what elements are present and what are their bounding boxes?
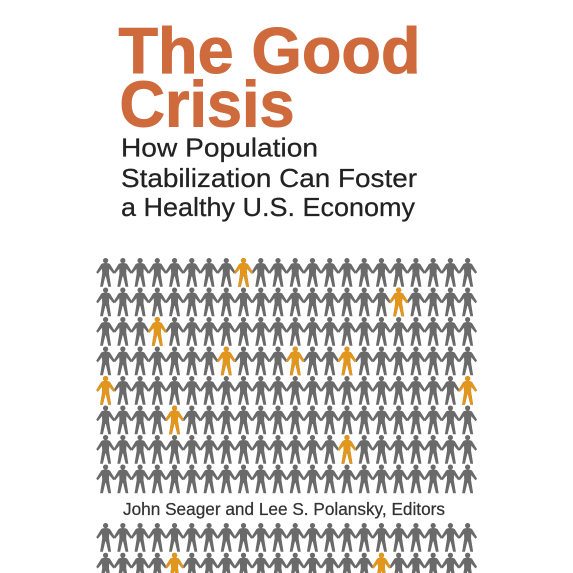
row 6 bbox=[96, 406, 477, 434]
subtitle bbox=[121, 132, 417, 222]
row 2 bbox=[96, 288, 477, 316]
title bbox=[118, 14, 420, 140]
row 7 bbox=[96, 435, 477, 464]
subtitle: a Healthy U.S. Economy bbox=[121, 192, 415, 222]
title: Crisis bbox=[120, 68, 294, 140]
row 4 bbox=[96, 346, 477, 375]
title: The Good bbox=[118, 14, 420, 87]
editors: John Seager and Lee S. Polansky, Editors bbox=[123, 499, 445, 519]
row 5 bbox=[96, 376, 477, 405]
row 9 bbox=[96, 523, 477, 552]
people grid lower bbox=[96, 523, 477, 573]
row 8 bbox=[96, 464, 477, 493]
row 1 bbox=[96, 258, 477, 287]
row 3 bbox=[96, 317, 477, 346]
subtitle: Stabilization Can Foster bbox=[121, 163, 417, 193]
people grid upper bbox=[96, 258, 477, 493]
subtitle: How Population bbox=[121, 132, 318, 162]
row 10 bbox=[96, 553, 477, 573]
